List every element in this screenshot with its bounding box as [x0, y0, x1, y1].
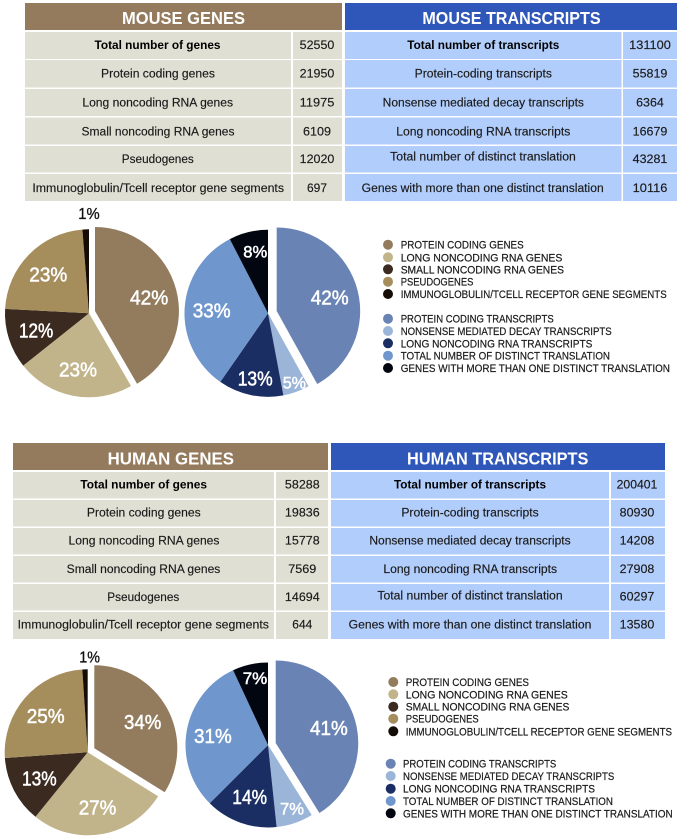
pie chart: human transcripts [186, 660, 358, 827]
row: long noncoding RNA genes: 11975 [300, 98, 334, 110]
row: pseudogenes: 12020 [300, 154, 334, 166]
row: protein coding genes: 19836 [285, 508, 320, 520]
row: total distinct translation [331, 584, 665, 610]
row: total transcripts: 131100 [629, 40, 671, 52]
pie chart: mouse transcripts [184, 228, 360, 397]
legend: human transcripts: PROTEIN CODING TRANSCRIPTS [403, 759, 556, 771]
pie chart: mouse genes: 23% [59, 360, 97, 382]
row: long noncoding RNA genes: 15778 [285, 536, 320, 548]
row: long noncoding RNA transcripts: Long noncoding RNA transcripts [383, 564, 557, 576]
row: total genes: 58288 [285, 479, 320, 491]
row: protein coding genes: 21950 [300, 68, 334, 80]
legend: human genes: LONG NONCODING RNA GENES [406, 689, 568, 701]
row: nonsense mediated decay transcripts: Nonsense mediated decay transcripts [369, 536, 571, 548]
row: total genes: 52550 [300, 40, 334, 52]
pie chart: human genes: 34% [124, 712, 162, 734]
row: nonsense mediated decay transcripts [345, 89, 677, 116]
pie chart: mouse transcripts: 33% [193, 300, 231, 322]
legend: human genes: SMALL NONCODING RNA GENES [406, 702, 569, 714]
legend: human transcripts [386, 759, 673, 820]
row: genes with more than one translation [331, 612, 665, 639]
legend: human transcripts: NONSENSE MEDIATED DECAY TRANSCRIPTS [403, 771, 614, 783]
row: protein-coding transcripts [331, 500, 665, 526]
heading: human transcripts: HUMAN TRANSCRIPTS [407, 448, 588, 468]
row: total distinct translation: 60297 [620, 592, 654, 604]
row: long noncoding RNA transcripts: 16679 [633, 126, 667, 138]
row: small noncoding RNA genes: Small noncoding RNA genes [67, 564, 221, 576]
row: total genes [13, 472, 328, 498]
row: immunoglobulin gene segments: 697 [307, 183, 327, 195]
heading: human transcripts [331, 443, 665, 470]
legend: human genes: PSEUDOGENES [406, 714, 479, 726]
row: long noncoding RNA genes: Long noncoding RNA genes [82, 98, 233, 110]
row: long noncoding RNA transcripts [345, 118, 677, 144]
row: long noncoding RNA transcripts [331, 556, 665, 582]
row: immunoglobulin gene segments [13, 612, 328, 639]
row: pseudogenes: Pseudogenes [122, 154, 194, 166]
pie chart: human transcripts: 7% [280, 799, 304, 818]
row: protein-coding transcripts: 55819 [633, 68, 667, 80]
pie chart: human transcripts: 31% [194, 726, 232, 748]
row: total genes [25, 32, 342, 59]
legend: mouse transcripts: PROTEIN CODING TRANSCRIPTS [401, 314, 554, 326]
pie chart: human transcripts: 41% [310, 718, 348, 740]
heading: human genes [13, 443, 328, 470]
row: genes with more than one translation [345, 174, 677, 201]
row: long noncoding RNA genes [25, 89, 342, 116]
pie chart: mouse genes [5, 206, 179, 397]
row: total transcripts [331, 472, 665, 498]
row: immunoglobulin gene segments: 644 [292, 620, 313, 632]
row: genes with more than one translation: 10116 [633, 183, 667, 195]
pie chart: human genes [5, 650, 177, 835]
pie chart: mouse genes: 12% [19, 321, 53, 343]
table: mouse transcripts [345, 3, 677, 201]
row: total distinct translation: Total number of distinct translation [377, 590, 563, 602]
heading: mouse genes [25, 3, 342, 30]
pie chart: human transcripts: 7% [243, 669, 267, 688]
row: protein coding genes [13, 500, 328, 526]
row: immunoglobulin gene segments: Immunoglobulin/Tcell receptor gene segments [32, 183, 284, 195]
legend: mouse transcripts [383, 314, 670, 375]
heading: mouse genes: MOUSE GENES [122, 8, 245, 28]
row: protein coding genes: Protein coding genes [87, 508, 201, 520]
row: total transcripts: Total number of transcripts [407, 40, 559, 52]
row: pseudogenes: 14694 [285, 592, 320, 604]
heading: mouse transcripts: MOUSE TRANSCRIPTS [422, 8, 601, 28]
pie chart: mouse transcripts: 5% [283, 373, 306, 392]
pie chart: human transcripts: 14% [232, 787, 267, 809]
row: total distinct translation [345, 146, 677, 172]
table: human transcripts [331, 443, 665, 639]
row: pseudogenes [13, 584, 328, 610]
row: protein-coding transcripts: 80930 [620, 508, 654, 520]
row: protein coding genes [25, 60, 342, 88]
legend: human genes [388, 677, 672, 738]
legend: human transcripts: LONG NONCODING RNA TRANSCRIPTS [403, 784, 595, 796]
legend: mouse transcripts: LONG NONCODING RNA TRANSCRIPTS [401, 338, 592, 350]
legend: mouse genes: SMALL NONCODING RNA GENES [401, 264, 564, 276]
table: human genes [13, 443, 328, 639]
row: long noncoding RNA genes: Long noncoding RNA genes [68, 536, 220, 548]
pie chart: human genes: 25% [27, 706, 65, 728]
legend: human genes: PROTEIN CODING GENES [406, 677, 529, 689]
legend: mouse transcripts: NONSENSE MEDIATED DECAY TRANSCRIPTS [401, 326, 612, 338]
row: total distinct translation: 43281 [633, 154, 667, 166]
row: total transcripts [345, 32, 677, 59]
legend: mouse transcripts: GENES WITH MORE THAN ONE DISTINCT TRANSLATION [401, 363, 670, 375]
pie chart: mouse genes: 42% [130, 287, 169, 309]
pie chart: human genes: 1% [79, 650, 100, 667]
heading: mouse transcripts [345, 3, 677, 30]
row: nonsense mediated decay transcripts: 6364 [636, 98, 664, 110]
row: small noncoding RNA genes: 7569 [288, 564, 316, 576]
row: small noncoding RNA genes: 6109 [303, 126, 331, 138]
legend: mouse genes: LONG NONCODING RNA GENES [401, 252, 562, 264]
row: total genes: Total number of genes [80, 479, 207, 491]
legend: mouse genes: PROTEIN CODING GENES [401, 240, 524, 252]
legend: mouse genes: PSEUDOGENES [401, 277, 473, 289]
row: genes with more than one translation: Genes with more than one distinct translation [362, 183, 604, 195]
pie chart: mouse genes: 1% [78, 206, 100, 223]
pie chart: human genes: 27% [79, 797, 117, 819]
row: pseudogenes [25, 146, 342, 172]
row: total distinct translation: Total number of distinct translation [390, 152, 576, 164]
row: nonsense mediated decay transcripts: 14208 [620, 536, 654, 548]
row: small noncoding RNA genes [13, 556, 328, 582]
pie chart: mouse transcripts: 13% [238, 368, 273, 390]
row: protein-coding transcripts [345, 60, 677, 88]
table: mouse genes [25, 3, 342, 201]
pie chart: mouse transcripts: 42% [311, 287, 349, 309]
legend: human transcripts: TOTAL NUMBER OF DISTINCT TRANSLATION [403, 796, 613, 808]
pie chart: mouse transcripts: 8% [243, 243, 267, 262]
heading: human genes: HUMAN GENES [108, 448, 234, 468]
row: pseudogenes: Pseudogenes [107, 592, 180, 604]
row: total transcripts: Total number of transcripts [394, 479, 546, 491]
legend: mouse transcripts: TOTAL NUMBER OF DISTINCT TRANSLATION [401, 351, 610, 363]
legend: mouse genes [383, 240, 667, 301]
row: small noncoding RNA genes: Small noncoding RNA genes [82, 126, 235, 138]
row: total genes: Total number of genes [94, 40, 220, 52]
row: genes with more than one translation: Genes with more than one distinct translation [349, 620, 591, 632]
row: long noncoding RNA transcripts: Long noncoding RNA transcripts [396, 126, 571, 138]
row: protein-coding transcripts: Protein-coding transcripts [415, 68, 552, 80]
row: nonsense mediated decay transcripts: Nonsense mediated decay transcripts [383, 98, 584, 110]
row: immunoglobulin gene segments [25, 174, 342, 201]
row: total transcripts: 200401 [617, 479, 657, 491]
row: protein-coding transcripts: Protein-coding transcripts [401, 508, 539, 520]
row: nonsense mediated decay transcripts [331, 528, 665, 554]
pie chart: mouse genes: 23% [29, 264, 68, 286]
row: small noncoding RNA genes [25, 118, 342, 144]
row: protein coding genes: Protein coding genes [101, 68, 215, 80]
row: immunoglobulin gene segments: Immunoglobulin/Tcell receptor gene segments [18, 620, 269, 632]
row: long noncoding RNA transcripts: 27908 [620, 564, 654, 576]
pie chart: human genes: 13% [22, 768, 57, 790]
row: genes with more than one translation: 13580 [620, 620, 654, 632]
row: long noncoding RNA genes [13, 528, 328, 554]
